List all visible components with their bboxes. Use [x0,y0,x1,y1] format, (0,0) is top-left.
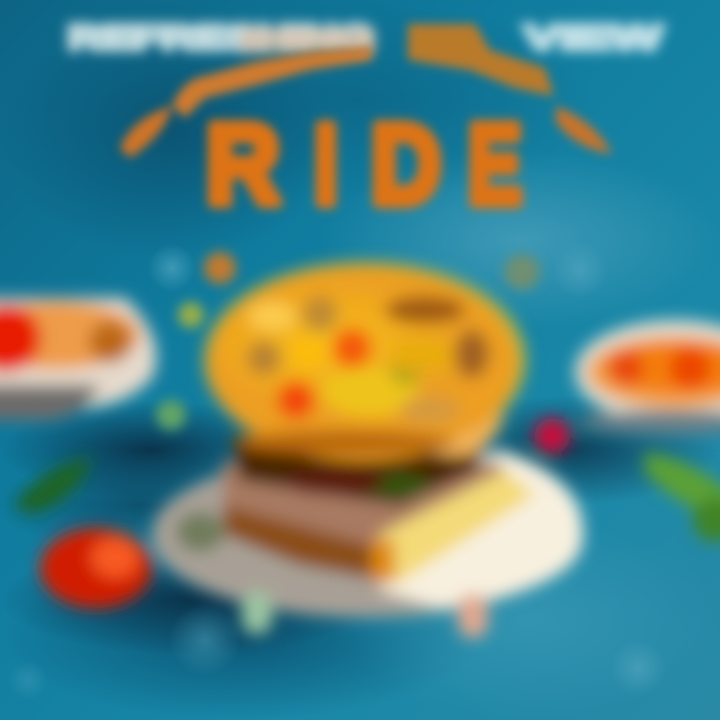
heading: white title line: VIEW [524,19,663,57]
quiche top [204,262,526,461]
floating ingredient dots [148,242,608,430]
right leaves [645,452,720,542]
sandwich base [222,436,535,585]
food illustration [0,262,720,638]
right bowl [575,320,720,434]
heading: RIDE: E [468,102,522,227]
heading: orange arc lettering: ZIA [408,23,474,64]
heading: white title line [68,19,663,57]
heading: RIDE: I [314,102,338,227]
heading: white title line: REFRESHING [68,19,374,57]
tomato [40,528,152,608]
plate [152,450,583,638]
heading: RIDE [206,102,522,227]
heading: RIDE: D [371,102,441,227]
left leaf [14,458,92,514]
heading: orange arc lettering [120,23,612,158]
left bowl [0,298,156,420]
faint bottom glows [8,604,666,700]
heading: RIDE: R [206,102,280,227]
red berry [534,418,570,454]
